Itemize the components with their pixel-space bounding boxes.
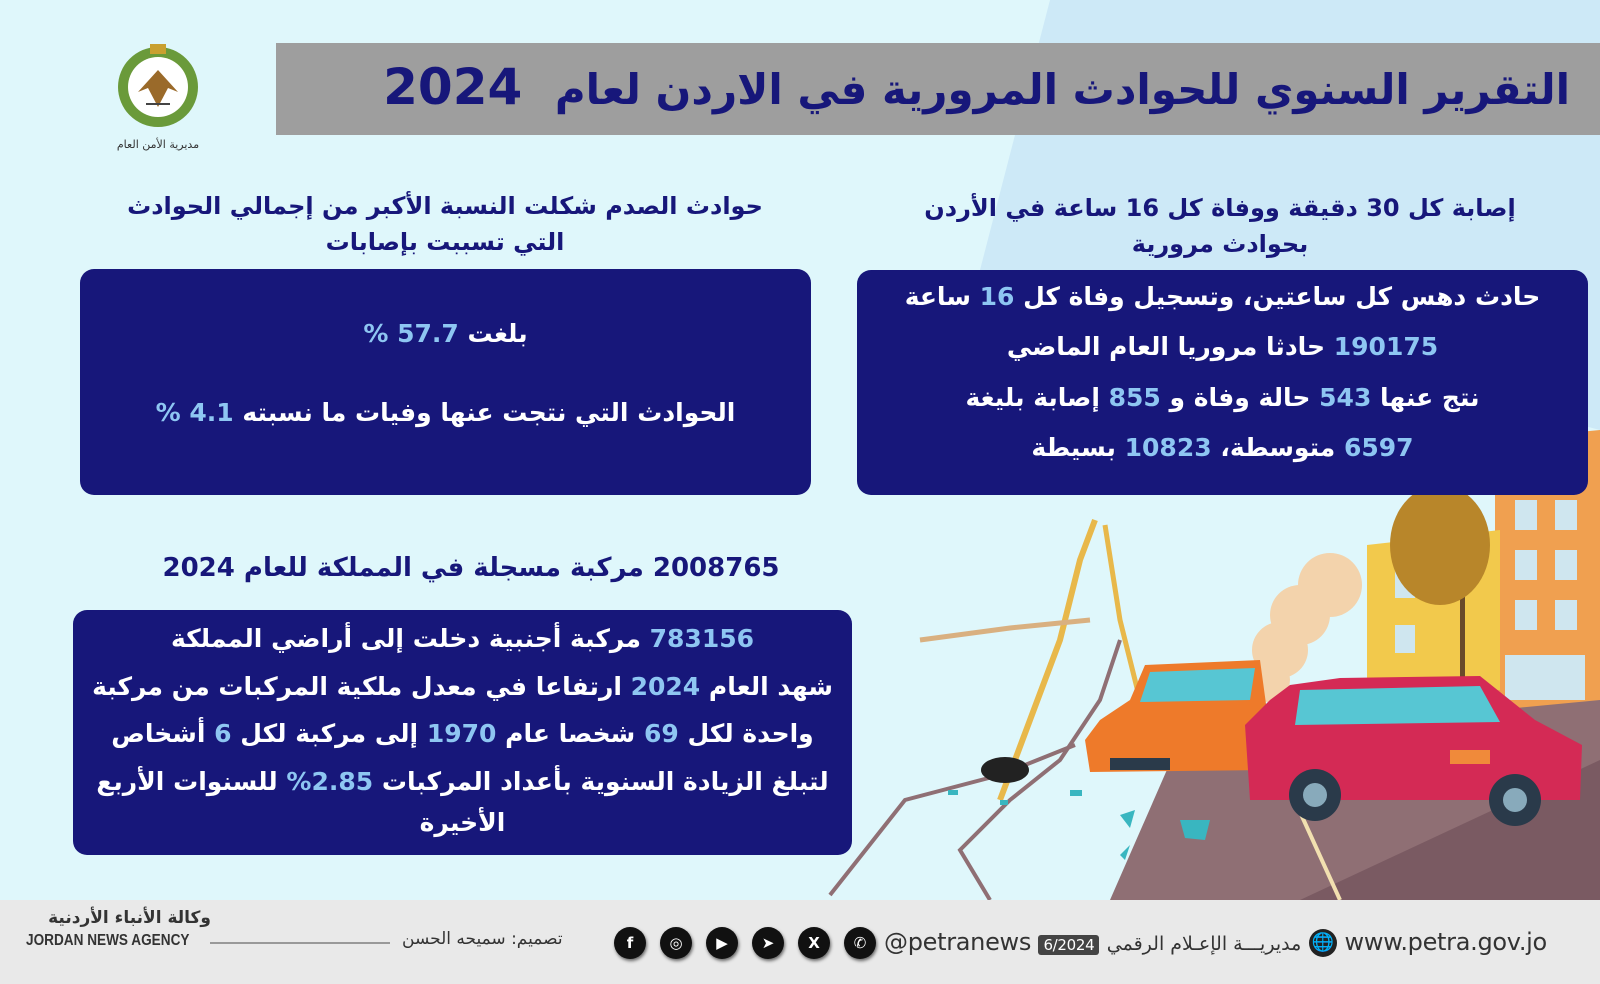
heading: right xyxy=(924,193,1516,258)
social icons: X xyxy=(808,934,820,952)
heading: left xyxy=(127,191,763,256)
footer: designer: تصميم: سميحه الحسن xyxy=(402,929,563,949)
title bar: التقرير السنوي للحوادث المرورية في الاردن لعام 2024 xyxy=(383,58,1570,116)
social icons: ➤ xyxy=(762,934,774,952)
heading: left: التي تسببت بإصابات xyxy=(326,228,564,256)
social icons: ◎ xyxy=(669,934,683,952)
heading: vehicles: 2008765 مركبة مسجلة في المملكة للعام 2024 xyxy=(162,553,780,583)
social icons: f xyxy=(627,934,633,952)
heading: right: بحوادث مرورية xyxy=(1132,230,1308,258)
logo xyxy=(117,44,199,151)
panel: collision share xyxy=(80,269,811,495)
footer: handle and url: 🌐 xyxy=(1312,932,1334,953)
panel: vehicles: الأخيرة xyxy=(420,808,505,837)
panel: right stats: 6597 متوسطة، 10823 بسيطة xyxy=(1031,433,1414,462)
footer: handle and url: @petranews 6/2024 مديريـــة الإعـلام الرقمي www.petra.gov.jo xyxy=(884,928,1547,956)
panel: vehicles: 783156 مركبة أجنبية دخلت إلى أراضي المملكة xyxy=(171,624,754,653)
panel: collision share: بلغت 57.7 % xyxy=(363,319,528,348)
footer: agency name: وكالة الأنباء الأردنية xyxy=(48,908,211,928)
footer: agency name xyxy=(26,906,211,949)
panel: right stats xyxy=(857,270,1588,495)
title bar xyxy=(276,43,1600,135)
panel: vehicles: شهد العام 2024 ارتفاعا في معدل ملكية المركبات من مركبة xyxy=(92,672,833,701)
heading: right: إصابة كل 30 دقيقة ووفاة كل 16 ساعة في الأردن xyxy=(924,194,1516,222)
footer xyxy=(0,900,1600,984)
panel: vehicles: لتبلغ الزيادة السنوية بأعداد المركبات 2.85% للسنوات الأربع xyxy=(96,767,829,796)
social icons: ▶ xyxy=(716,934,728,952)
logo: مديرية الأمن العام xyxy=(117,137,199,151)
footer: agency name: JORDAN NEWS AGENCY xyxy=(26,932,189,949)
panel: collision share: الحوادث التي نتجت عنها وفيات ما نسبته 4.1 % xyxy=(156,398,735,427)
panel: right stats: حادث دهس كل ساعتين، وتسجيل وفاة كل 16 ساعة xyxy=(905,282,1540,311)
social icons: ✆ xyxy=(854,934,866,952)
heading: left: حوادث الصدم شكلت النسبة الأكبر من إجمالي الحوادث xyxy=(127,192,763,220)
panel: right stats: 190175 حادثا مروريا العام الماضي xyxy=(1007,332,1438,361)
panel: vehicles: واحدة لكل 69 شخصا عام 1970 إلى مركبة لكل 6 أشخاص xyxy=(111,719,814,748)
panel: right stats: نتج عنها 543 حالة وفاة و 855 إصابة بليغة xyxy=(965,383,1480,412)
illustration: car crash xyxy=(828,430,1600,900)
panel: vehicles xyxy=(73,610,852,855)
